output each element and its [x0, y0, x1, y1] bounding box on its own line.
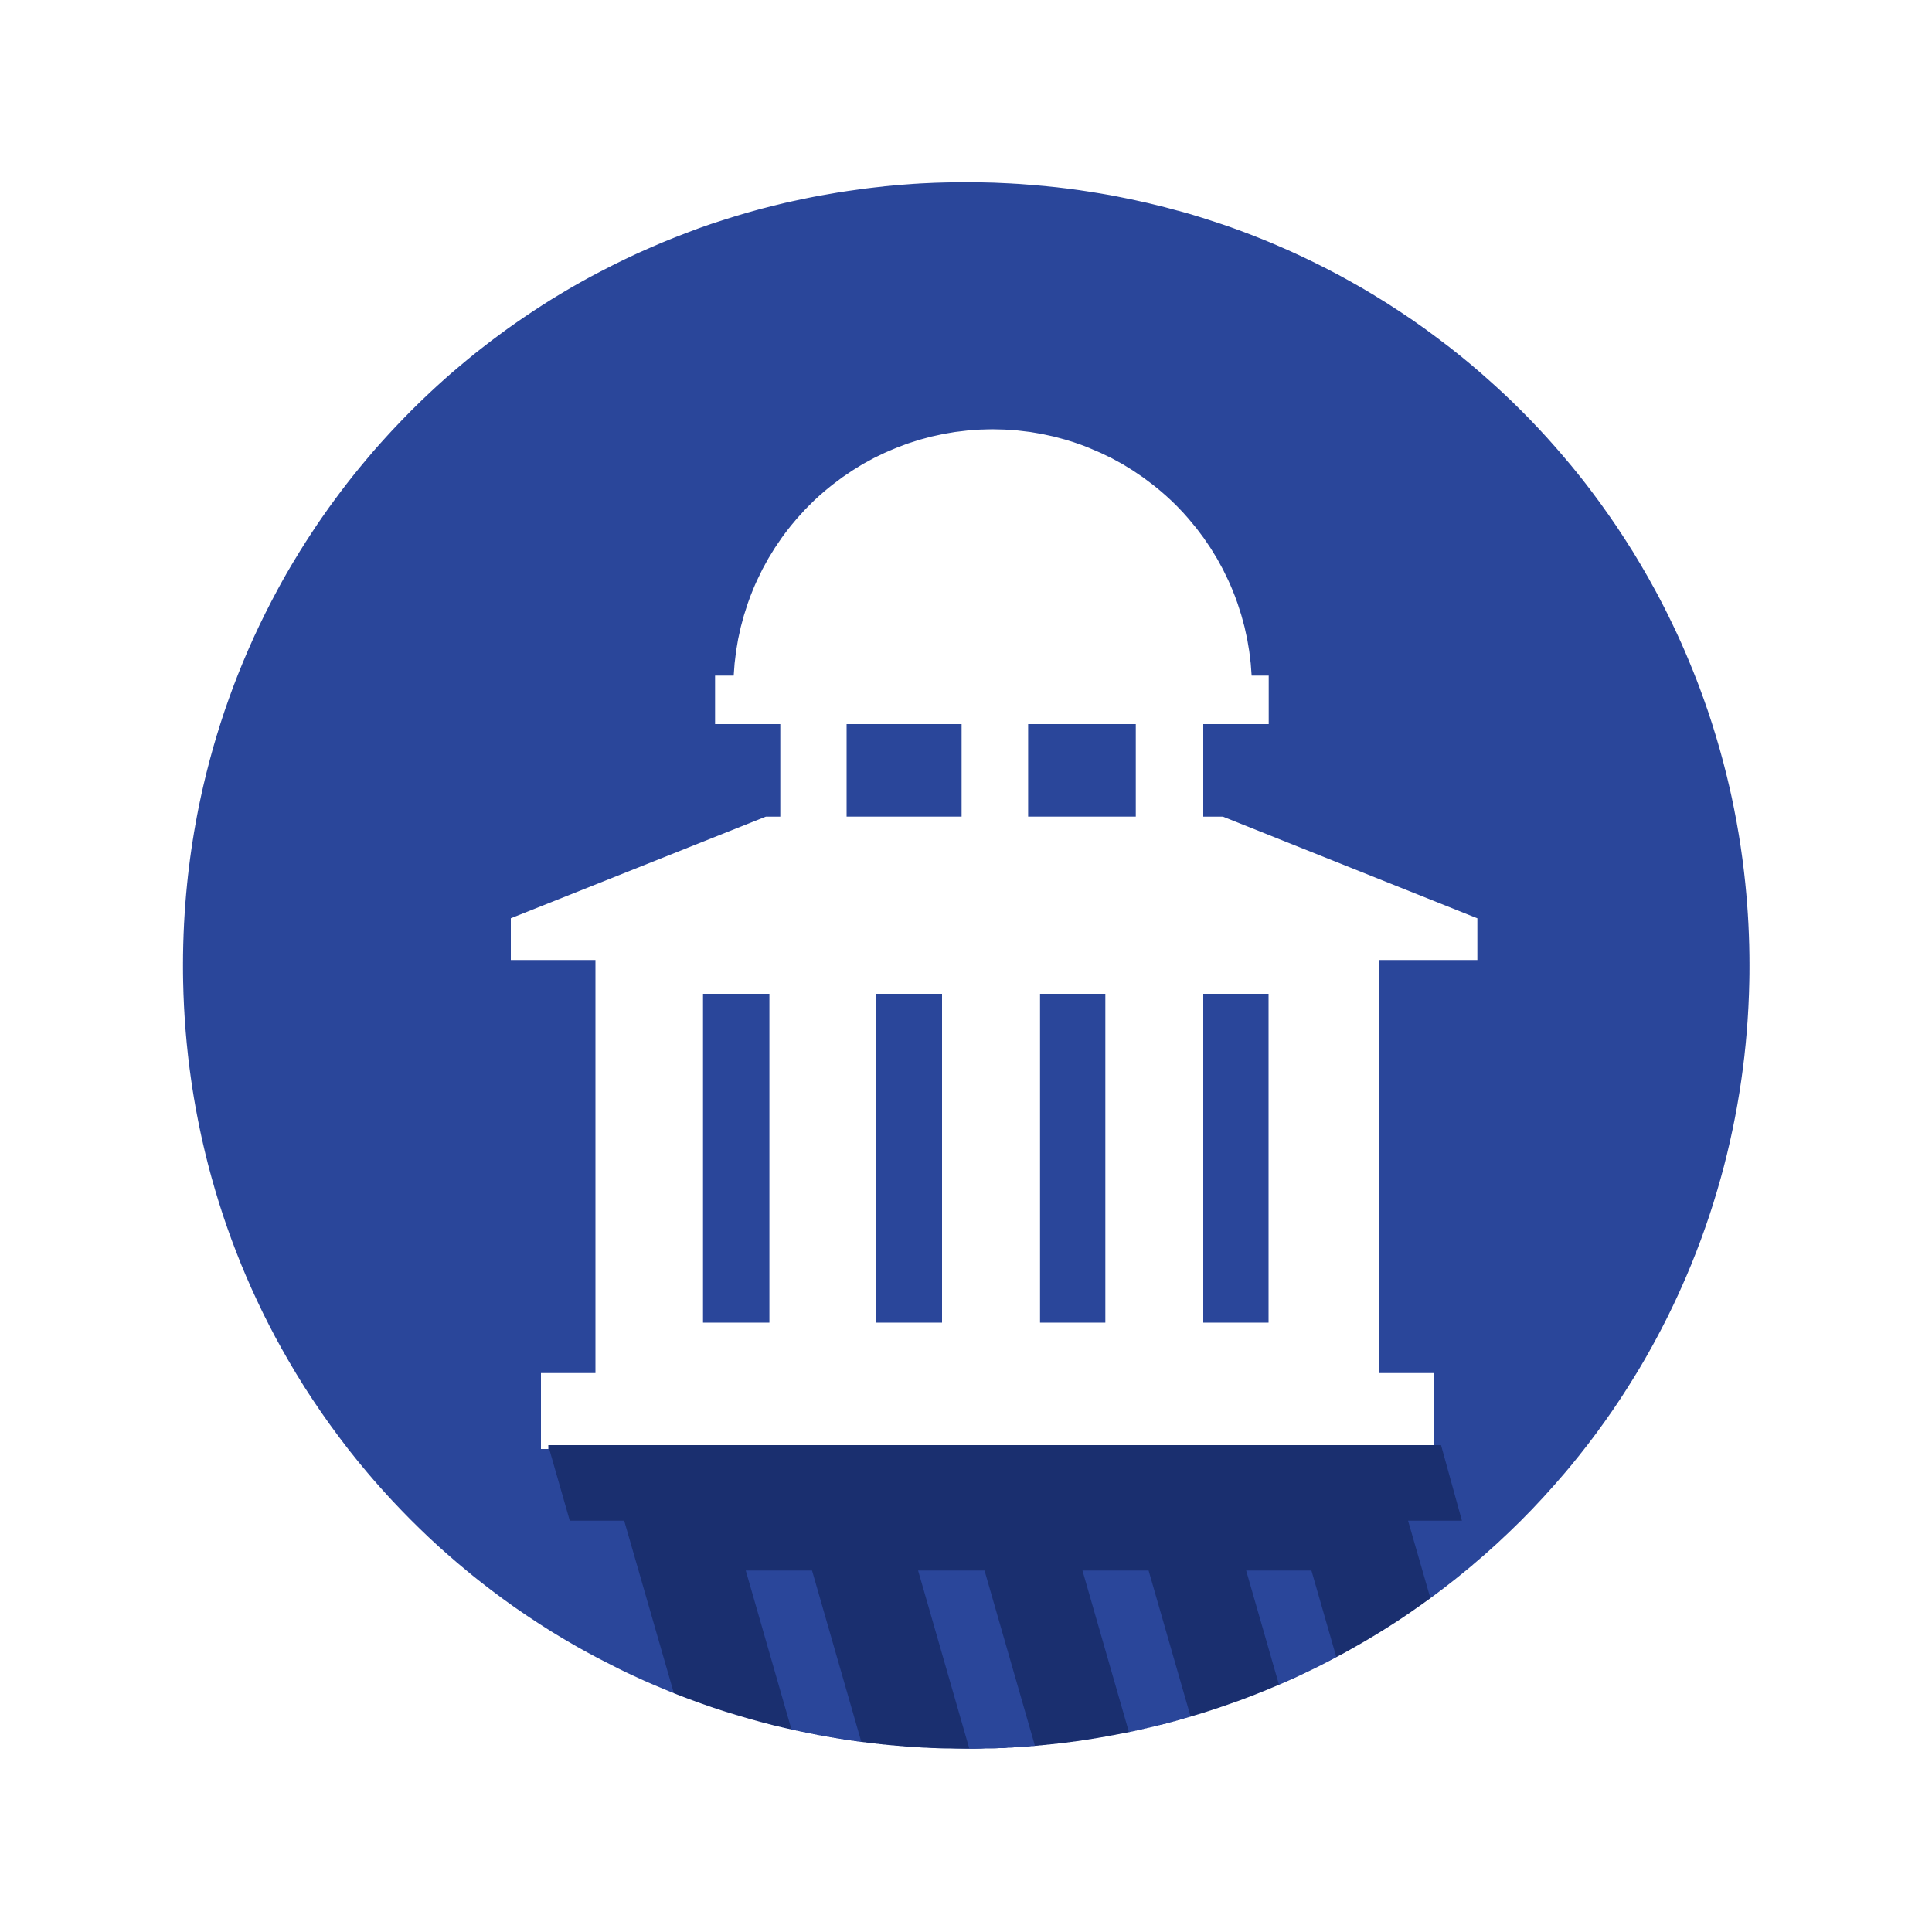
white capitol building [511, 430, 1478, 1449]
gaps between columns [703, 994, 1269, 1323]
building long shadow [549, 1445, 1462, 1749]
blue circle background [183, 182, 1750, 1749]
icon: government building in blue circle [182, 182, 1750, 1749]
shadow gaps between columns [746, 1570, 1337, 1749]
building silhouette with dome [511, 430, 1478, 1449]
drum windows [847, 724, 1136, 817]
